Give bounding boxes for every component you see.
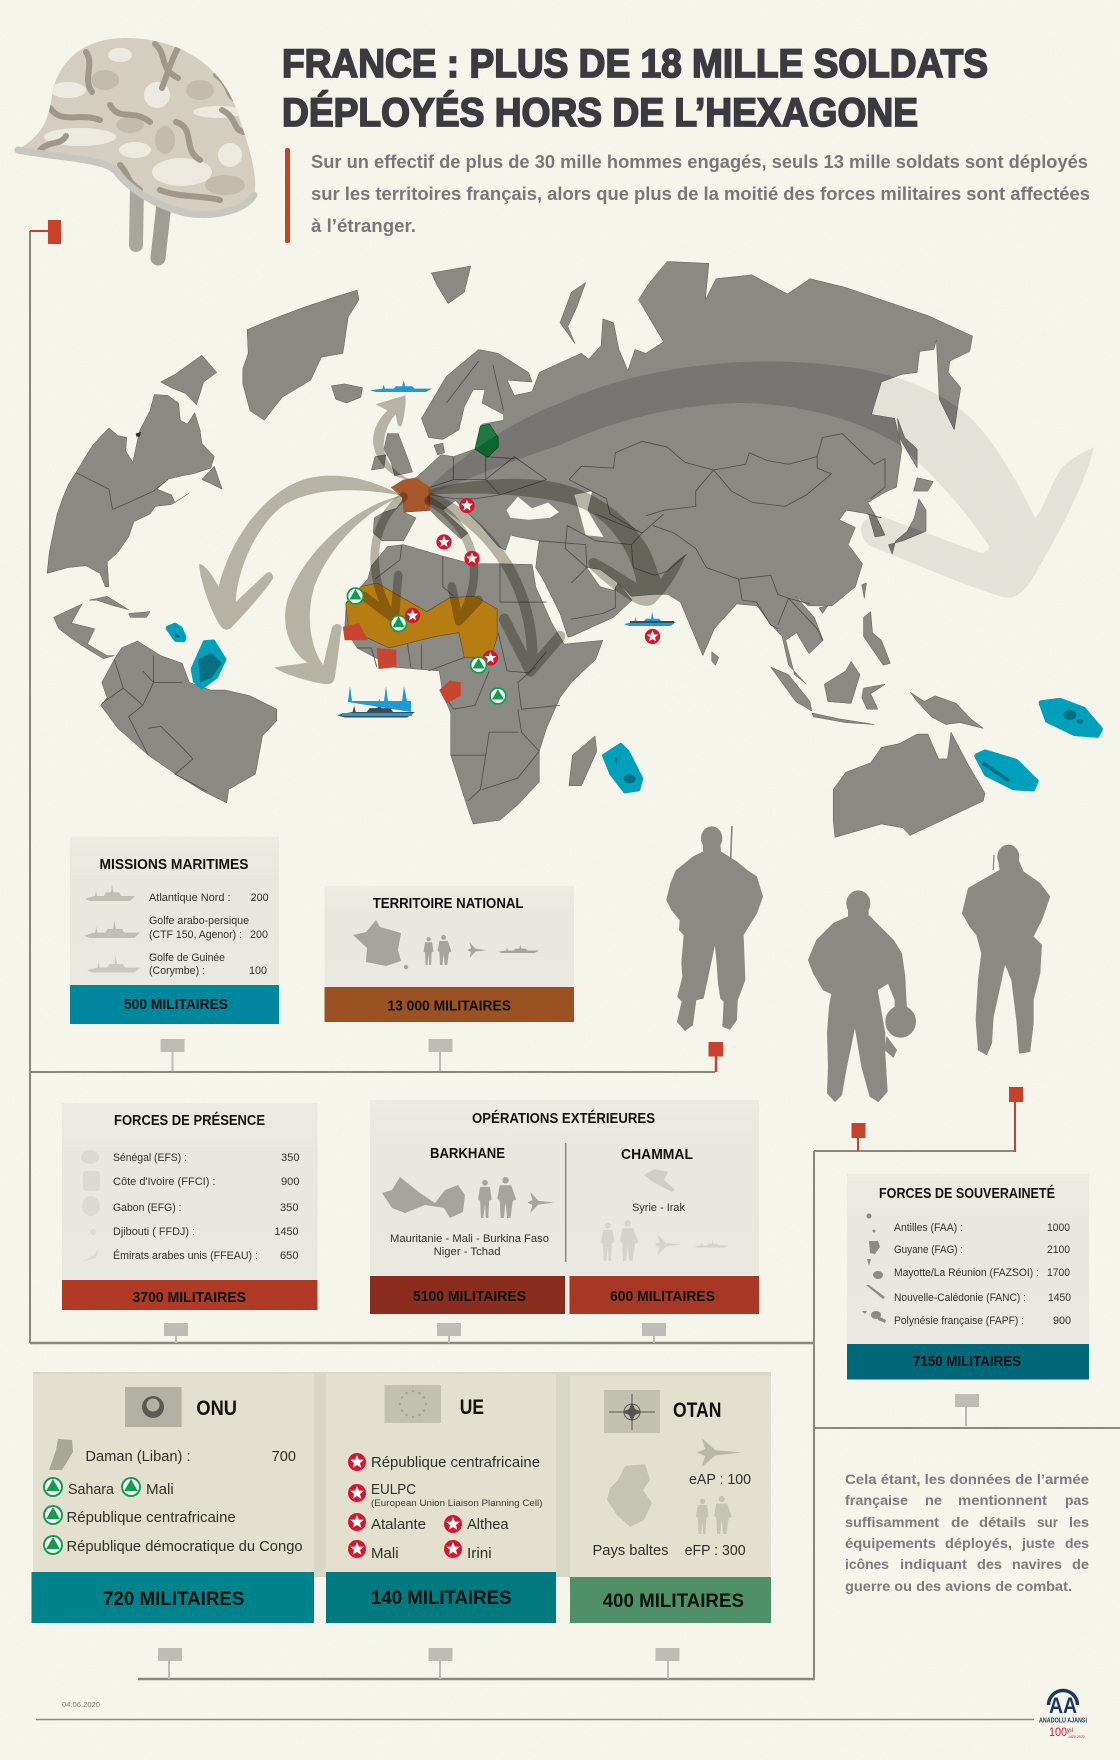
panel: territoire national [324,886,574,1022]
panel: forces de présence: Gabon (EFG) : [113,1202,182,1214]
text block: note on equipment: les [1069,1514,1089,1530]
panel: UE [326,1374,556,1623]
panel: territoire national: TERRITOIRE NATIONAL [373,896,524,912]
text block: note on equipment: des [1065,1535,1089,1551]
panel: forces de présence: 350 [280,1202,298,1214]
panel: UE: République centrafricaine [371,1454,540,1471]
logo: Anadolu Ajansi: ANADOLU AJANSI [1039,1718,1087,1724]
map: highlighted regions [343,424,498,703]
panel: territoire national: 13 000 MILITAIRES [387,998,511,1015]
panel: forces de présence: Sénégal (EFS) : [113,1152,187,1164]
panel: forces de souveraineté: Antilles (FAA) : [894,1222,963,1234]
panel: missions maritimes: (Corymbe) : [149,965,205,977]
panel: UE: 140 MILITAIRES [371,1588,512,1609]
panel: missions maritimes: 200 [251,892,269,904]
logo: Anadolu Ajansi: 1920-2020 [1068,1735,1085,1739]
title: FRANCE : PLUS DE 18 MILLE SOLDATS [282,42,988,86]
text block: note on equipment: de [1072,1556,1089,1572]
logo: Anadolu Ajansi [1039,1690,1087,1739]
text block: note on equipment: sur [1037,1514,1059,1530]
text block: note on equipment: juste [1021,1535,1055,1551]
panel: forces de souveraineté: 7150 MILITAIRES [913,1353,1021,1370]
sub-panel: Barkhane: 5100 MILITAIRES [413,1288,526,1305]
text block: note on equipment: française [845,1492,908,1508]
connector: panel row 1 line with red marker [30,1042,723,1072]
sub-panel: Barkhane [370,1146,565,1314]
panel: OTAN: eAP : 100 [689,1471,751,1488]
panel: forces de souveraineté: Polynésie française (FAPF) : [894,1315,1024,1327]
panel: missions maritimes: 200 [250,929,268,941]
panel: ONU: République démocratique du Congo [66,1538,303,1555]
panel: forces de présence: 1450 [274,1226,298,1238]
panel: ONU: 720 MILITAIRES [103,1589,244,1610]
panel: opérations extérieures: OPÉRATIONS EXTÉRIEURES [472,1110,655,1127]
panel: ONU [32,1374,314,1623]
panel: forces de souveraineté: FORCES DE SOUVERAINETÉ [879,1185,1055,1202]
panel: UE: Irini [467,1545,492,1562]
text block: note on equipment: guerre ou des avions de combat. [845,1578,1072,1594]
map: red star markers [405,498,660,666]
logo: Anadolu Ajansi: yıl [1067,1728,1073,1734]
sub-panel: Chammal [570,1147,759,1314]
panel: forces de souveraineté: 1700 [1047,1267,1070,1279]
panel: forces de présence: Émirats arabes unis (FFEAU) : [113,1249,258,1262]
sub-panel: Barkhane: Niger - Tchad [434,1246,501,1258]
panel: OTAN: 400 MILITAIRES [603,1591,744,1612]
panel: forces de souveraineté: 900 [1053,1315,1071,1327]
panel: UE: Mali [371,1545,399,1562]
panel: ONU: République centrafricaine [66,1509,236,1526]
top connector: red square and left vertical line [30,220,61,1343]
panel: forces de présence: Djibouti ( FFDJ) : [113,1226,195,1238]
sub-panel: Chammal: CHAMMAL [621,1147,693,1163]
logo: Anadolu Ajansi: 100 [1049,1725,1067,1739]
panel: forces de souveraineté: 2100 [1047,1244,1070,1256]
soldier silhouettes [667,826,1050,1102]
text block: note on equipment: des [977,1556,1002,1572]
panel: forces de souveraineté: Mayotte/La Réunion (FAZSOI) : [894,1267,1039,1279]
text block: note on equipment: de [951,1514,969,1530]
intro text block: sur les territoires français, alors que plus de la moitié des forces militaires sont affectées [311,184,1090,204]
panel: forces de présence: FORCES DE PRÉSENCE [114,1112,265,1129]
sub-panel: Chammal: Syrie - Irak [632,1202,685,1214]
panel: forces de présence: 900 [281,1176,300,1188]
text block: note on equipment: suffisamment [845,1514,939,1530]
date: 04.06.2020 [62,1700,100,1709]
footer rule [36,1718,1034,1720]
panel: forces de présence: 650 [280,1250,298,1262]
icon: camouflage helmet [10,30,270,258]
panel: OTAN [570,1376,771,1623]
icon: UN flag [125,1387,182,1427]
text block: note on equipment: indiquant [900,1556,967,1572]
intro text block: à l’étranger. [311,216,416,236]
panel: ONU: Daman (Liban) : [85,1448,191,1465]
panel: UE: UE [460,1396,484,1419]
title [282,42,988,135]
map: green triangle markers [347,587,507,705]
panel: forces de souveraineté: Nouvelle-Calédonie (FANC) : [894,1292,1026,1304]
text block: note on equipment: équipements [845,1535,936,1551]
intro text block: Sur un effectif de plus de 30 mille hommes engagés, seuls 13 mille soldats sont déployés [311,152,1088,172]
text block: note on equipment: icônes [845,1556,889,1572]
panel: UE: Althea [467,1516,509,1533]
panel: ONU: Sahara [68,1481,115,1498]
text block: note on equipment: navires [1012,1556,1062,1572]
map: country borders [76,361,885,801]
text block: note on equipment: ne [925,1492,942,1508]
map: ships [337,380,676,718]
panel: missions maritimes [70,837,279,1024]
panel: forces de présence: 3700 MILITAIRES [132,1289,246,1306]
panel: missions maritimes: Golfe arabo-persique [149,915,249,927]
panel: missions maritimes: 500 MILITAIRES [124,996,228,1013]
panel: missions maritimes: Atlantique Nord : [149,892,231,904]
sub-panel: Barkhane: Mauritanie - Mali - Burkina Faso [390,1233,549,1245]
text block: note on equipment: mentionnent [958,1492,1047,1508]
text block: note on equipment: déployés, [945,1535,1012,1551]
panel: ONU: Mali [146,1481,174,1498]
title: DÉPLOYÉS HORS DE L’HEXAGONE [282,90,918,135]
panel: ONU: ONU [196,1397,237,1420]
panel: missions maritimes: (CTF 150, Agenor) : [149,929,242,941]
panel: forces de présence: Côte d'Ivoire (FFCI) : [113,1176,216,1188]
text block: note on equipment [845,1471,1089,1594]
icon: EU flag [384,1385,441,1423]
panel: opérations extérieures [370,1100,759,1314]
logo: Anadolu Ajansi: AA [1049,1693,1077,1718]
map: overseas territory blobs [168,625,1101,791]
panel: forces de présence: 350 [281,1152,300,1164]
sub-panel: Chammal: 600 MILITAIRES [610,1288,715,1305]
map: deployment arrows [199,361,1094,684]
text block: note on equipment: pas [1065,1492,1089,1508]
text block: note on equipment: Cela étant, les données de l’armée [845,1471,1089,1487]
panel: forces de souveraineté: 1450 [1048,1292,1071,1304]
world map [47,261,1101,837]
panel tags and stems [158,1039,979,1679]
panel: missions maritimes: MISSIONS MARITIMES [100,857,249,873]
panel: missions maritimes: 100 [249,965,267,977]
panel: forces de présence [62,1103,318,1310]
panels backdrop: international missions [33,1372,771,1577]
panel: forces de souveraineté [847,1174,1089,1380]
map: landmasses [47,261,985,837]
panel: missions maritimes: Golfe de Guinée [149,952,225,964]
panel: ONU: 700 [272,1448,296,1465]
panel: UE: (European Union Liaison Planning Cell) [371,1498,542,1509]
sub-panel: Barkhane: BARKHANE [430,1146,505,1162]
panel: UE: EULPC [371,1481,416,1498]
icon: NATO flag [604,1390,660,1433]
connector: middle row line with red markers [30,1087,1120,1680]
intro text block [285,148,1090,243]
panel: OTAN: OTAN [673,1399,721,1422]
panel: OTAN: eFP : 300 [685,1542,746,1559]
panel: forces de souveraineté: 1000 [1047,1222,1070,1234]
text block: note on equipment: détails [979,1514,1026,1530]
panel: forces de souveraineté: Guyane (FAG) : [894,1244,963,1256]
panel: UE: Atalante [371,1516,426,1533]
panel: OTAN: Pays baltes [592,1542,668,1559]
